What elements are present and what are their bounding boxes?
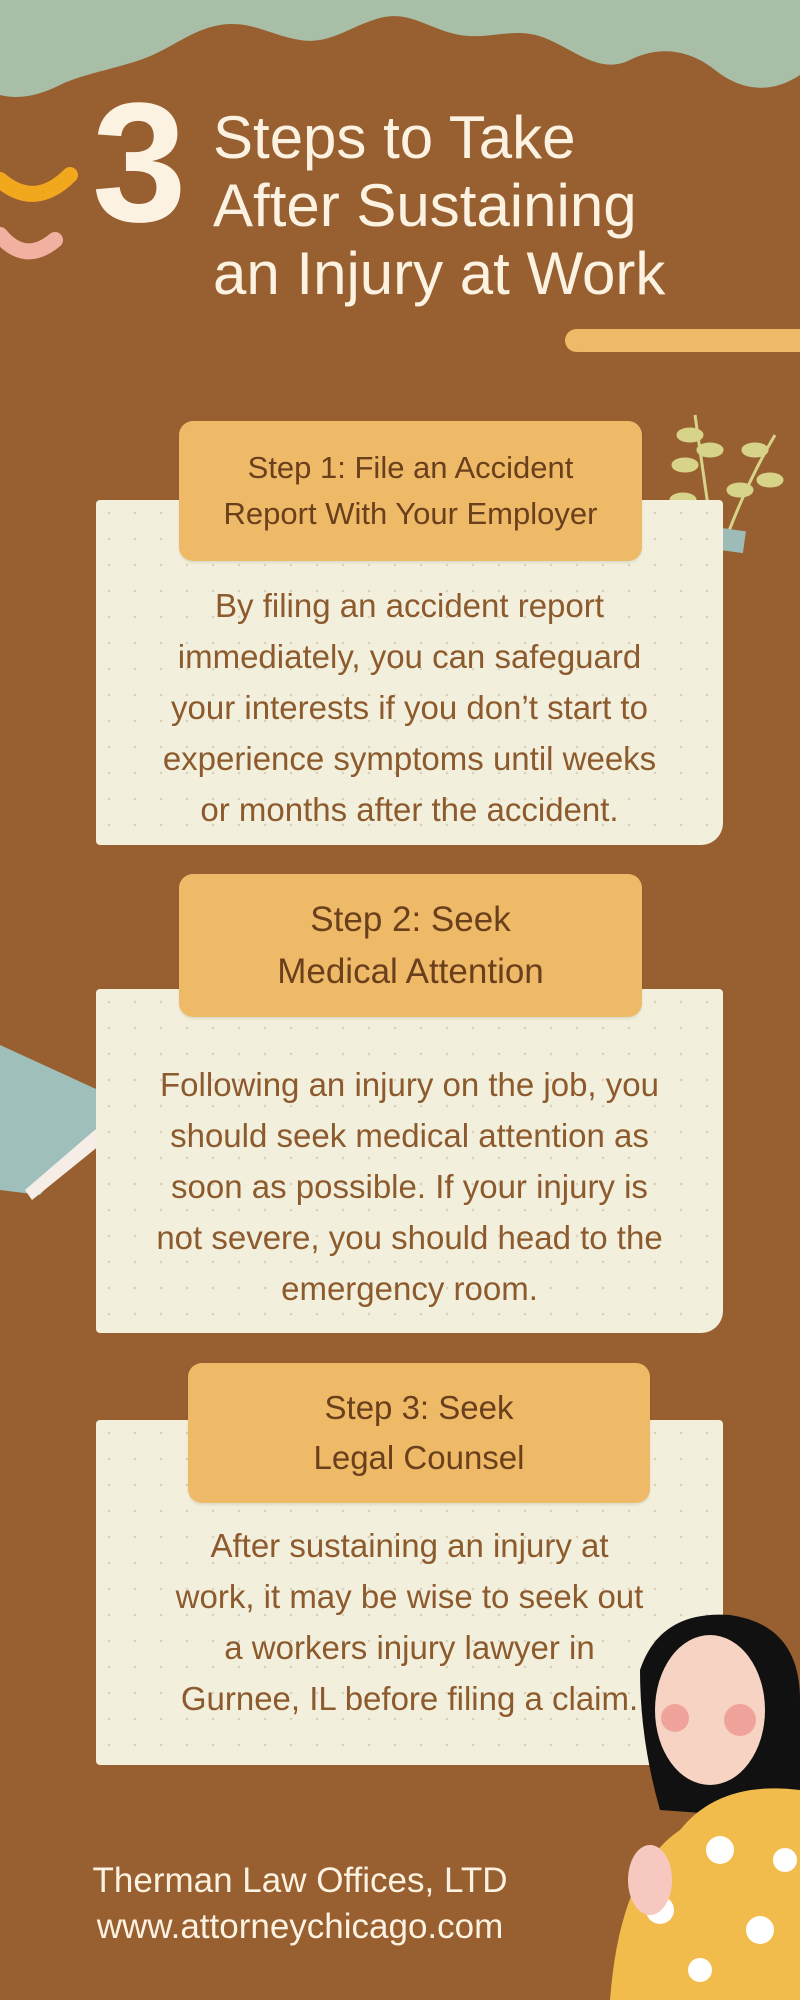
text: step 3 body: a workers injury lawyer in (224, 1629, 595, 1666)
panel: step 3 (96, 1420, 723, 1765)
text: step 2 body: Following an injury on the job, you (160, 1066, 659, 1103)
label: step 3 (188, 1363, 650, 1503)
text: step 1 body: immediately, you can safeguard (178, 638, 641, 675)
label: step 2 (179, 874, 642, 1017)
text: step 3 body: Gurnee, IL before filing a claim. (181, 1680, 638, 1717)
label: step 3: Step 3: Seek (325, 1389, 513, 1426)
text: step 1 body: or months after the accident. (200, 791, 619, 828)
panel: step 2 (96, 989, 723, 1333)
label: step 1: Step 1: File an Accident (248, 450, 573, 485)
title: an Injury at Work (213, 240, 665, 307)
decoration: left arcs (0, 167, 78, 260)
footer (93, 1861, 507, 1946)
text: step 1 body (163, 587, 656, 828)
text: step 1 body: experience symptoms until weeks (163, 740, 656, 777)
title: Steps to Take (213, 104, 575, 171)
top wave band (0, 0, 800, 97)
text: step 3 body: work, it may be wise to seek out (176, 1578, 643, 1615)
text: step 2 body: should seek medical attention as (170, 1117, 649, 1154)
label: step 1 (179, 421, 642, 561)
text: step 2 body (156, 1066, 663, 1307)
title: After Sustaining (213, 172, 637, 239)
footer: www.attorneychicago.com (97, 1907, 503, 1946)
illustration: woman (610, 1614, 800, 2000)
text: step 3 body (176, 1527, 644, 1717)
yellow pill (565, 329, 800, 352)
icon: plant (670, 414, 784, 554)
label: step 2: Medical Attention (277, 952, 544, 990)
text: step 2 body: not severe, you should head to the (156, 1219, 663, 1256)
footer: Therman Law Offices, LTD (93, 1861, 507, 1900)
text: step 2 body: emergency room. (281, 1270, 538, 1307)
text: step 1 body: By filing an accident report (215, 587, 604, 624)
label: step 3: Legal Counsel (314, 1439, 524, 1476)
text: step 1 body: your interests if you don’t start to (171, 689, 648, 726)
title number 3: 3 (92, 68, 187, 258)
label: step 2: Step 2: Seek (310, 900, 511, 938)
icon: book (0, 1045, 96, 1200)
title (213, 104, 666, 307)
panel: step 1 (96, 500, 723, 845)
text: step 2 body: soon as possible. If your injury is (171, 1168, 648, 1205)
text: step 3 body: After sustaining an injury at (210, 1527, 609, 1564)
label: step 1: Report With Your Employer (224, 496, 597, 531)
